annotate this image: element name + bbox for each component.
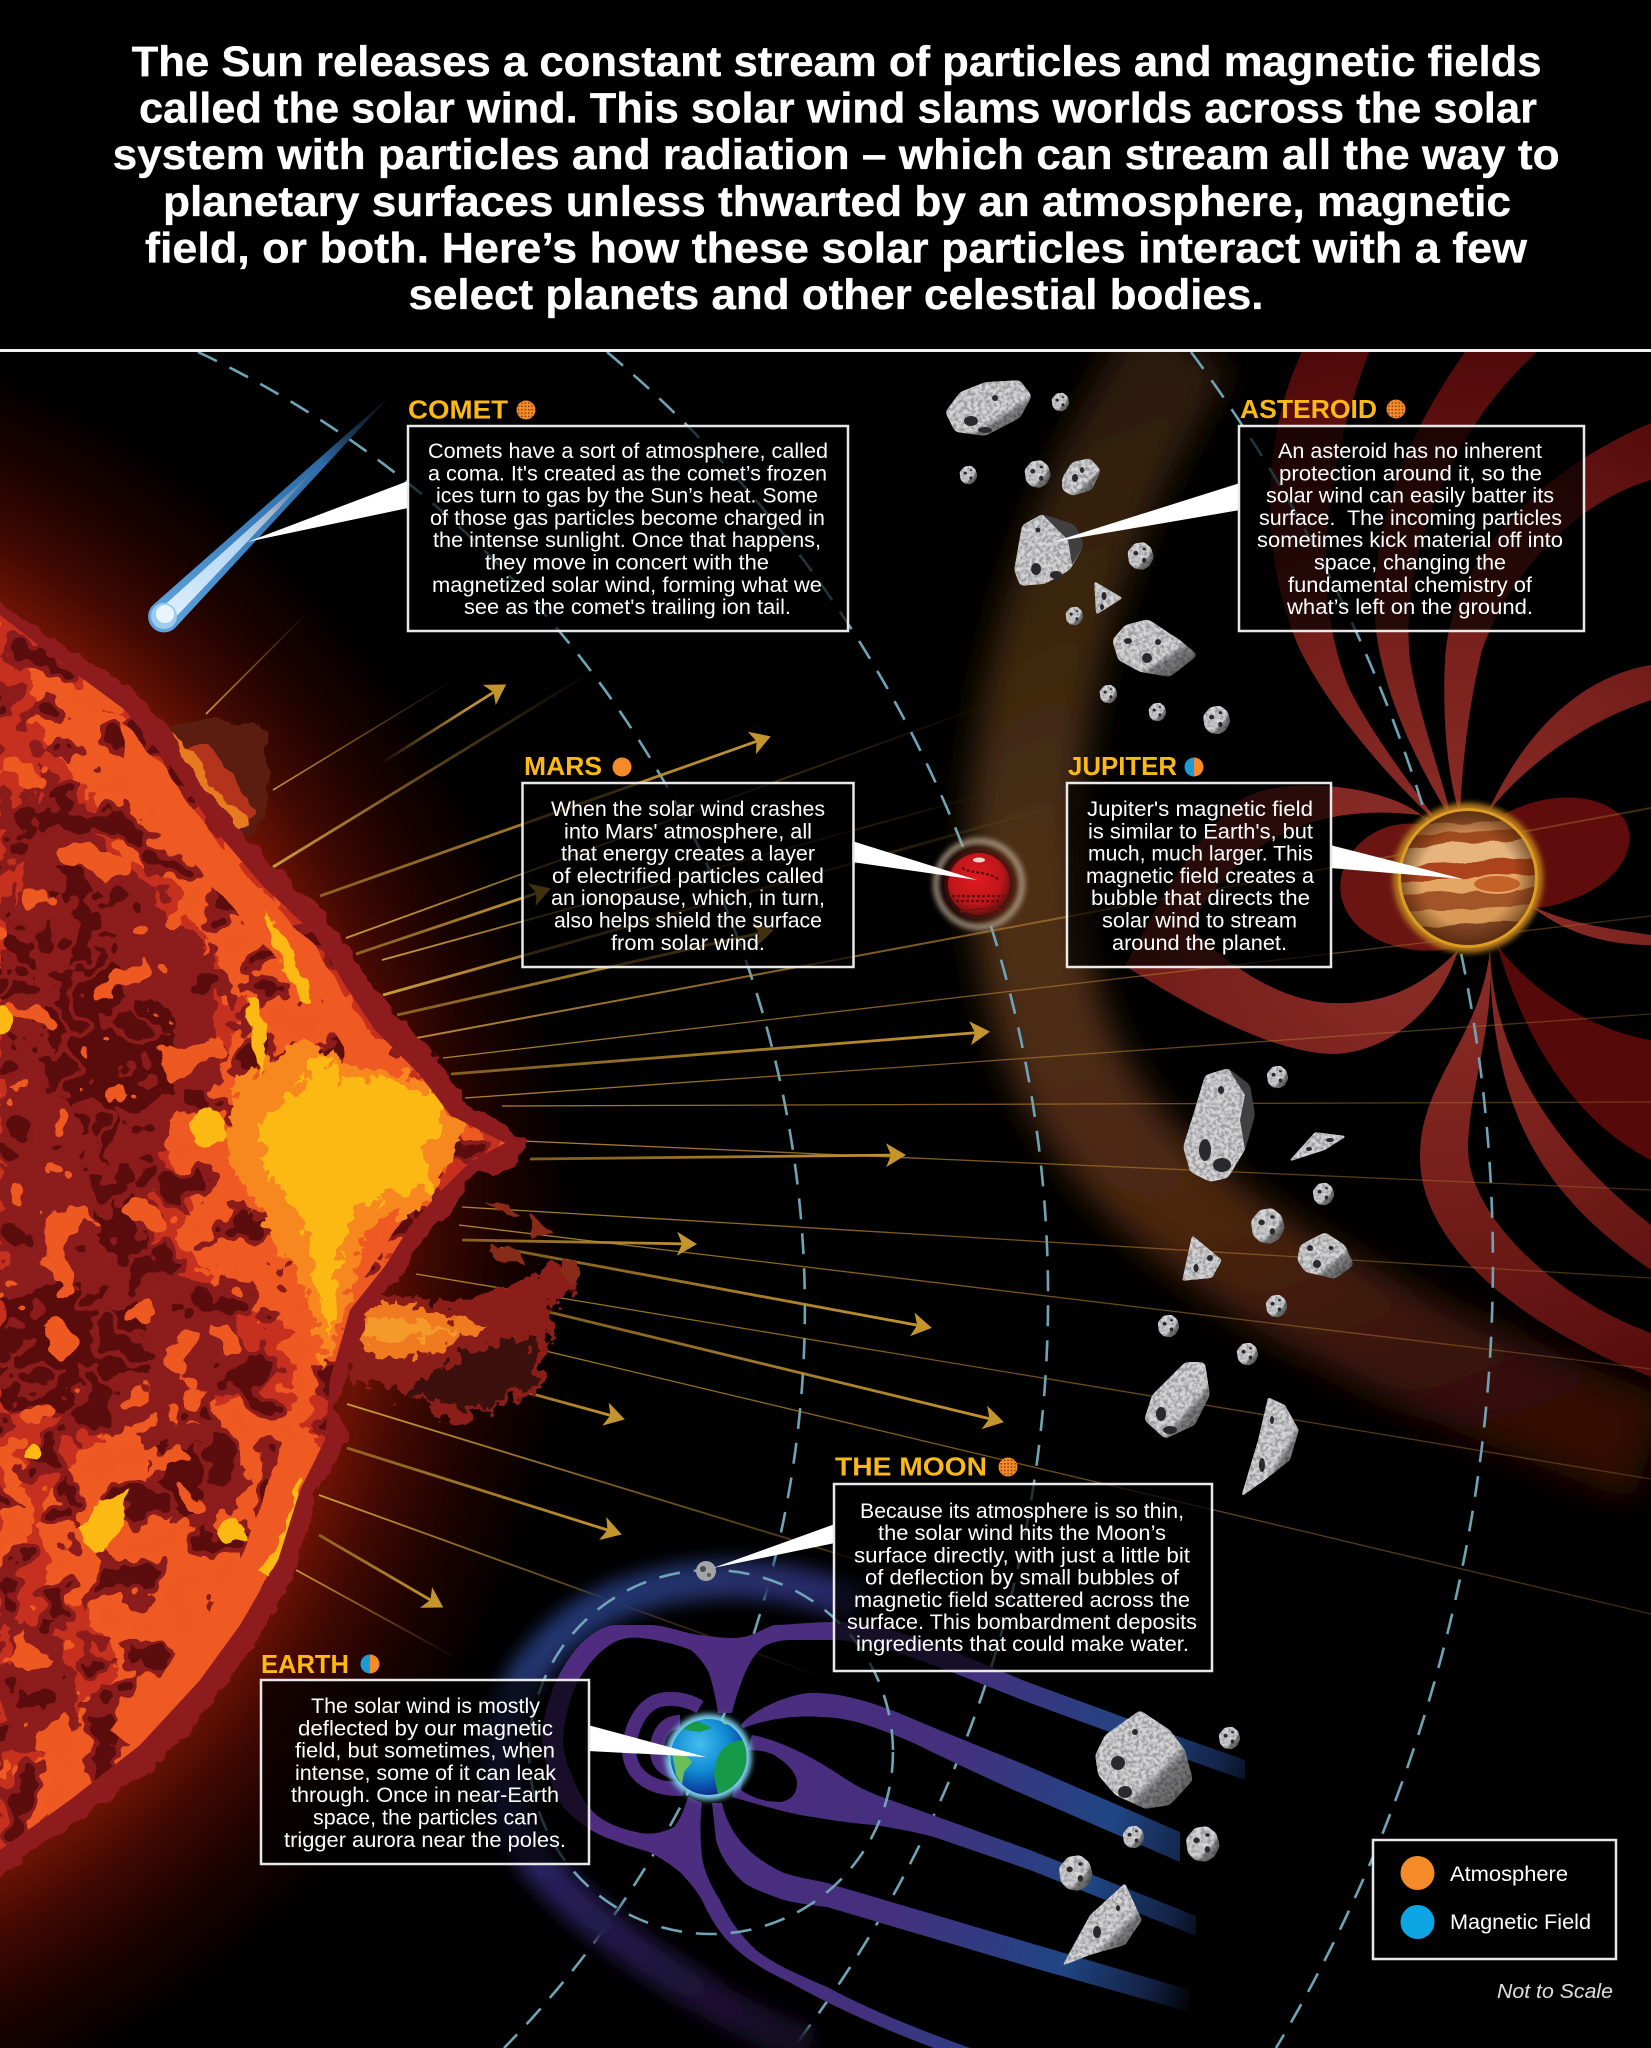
text: asteroid: sometimes kick material off into bbox=[1257, 529, 1563, 552]
sun fragments bbox=[486, 1202, 578, 1290]
text: the Moon: ingredients that could make water. bbox=[856, 1633, 1189, 1656]
lower tail bbox=[712, 1803, 1190, 2012]
arrow: centre 6 bbox=[520, 1305, 999, 1421]
legend: magnetic field: Magnetic Field bbox=[1450, 1911, 1591, 1934]
title: select planets and other celestial bodies. bbox=[408, 272, 1264, 319]
asteroid a1 bbox=[945, 380, 1032, 436]
text: the Moon: Because its atmosphere is so thin, bbox=[860, 1500, 1184, 1523]
callout pointer: comet bbox=[247, 481, 408, 542]
heading: Earth: EARTH bbox=[261, 1649, 349, 1679]
asteroid b7 bbox=[1182, 1235, 1222, 1281]
sun: mottled texture bbox=[0, 622, 505, 1845]
text: Jupiter: Jupiter's magnetic field bbox=[1087, 798, 1313, 821]
text: asteroid: space, changing the bbox=[1314, 552, 1506, 574]
icon: atmosphere hatch bbox=[516, 400, 536, 420]
bow shock haze around Jupiter bbox=[1025, 340, 1651, 1450]
text: comet: Comets have a sort of atmosphere, called bbox=[428, 440, 828, 463]
callout pointer: Earth bbox=[588, 1725, 706, 1757]
sun: clean orange limb bbox=[110, 720, 455, 1750]
sun prominence: upper bbox=[170, 715, 272, 835]
sun prominence: lower bbox=[345, 1265, 578, 1425]
text: comet: the intense sunlight. Once that happens, bbox=[433, 529, 821, 552]
text: comet: see as the comet's trailing ion tail. bbox=[464, 596, 791, 619]
callout pointer: Moon bbox=[713, 1524, 835, 1568]
planet: Earth bbox=[666, 1714, 752, 1800]
solar wind lines bbox=[206, 612, 1651, 1680]
icon: atmosphere hatch bbox=[998, 1458, 1018, 1476]
night side upper tail bbox=[741, 1693, 1180, 1862]
icon: atmosphere and magnetic field bbox=[1184, 758, 1204, 776]
heading: comet: COMET bbox=[408, 394, 508, 424]
text: Jupiter: is similar to Earth's, but bbox=[1088, 820, 1313, 843]
text: Mars: into Mars' atmosphere, all bbox=[564, 820, 812, 843]
text: Mars: of electrified particles called bbox=[552, 865, 824, 888]
text: Jupiter: solar wind to stream bbox=[1102, 910, 1297, 932]
sun: hot spots bbox=[225, 1040, 462, 1370]
title: field, or both. Here’s how these solar particles interact with a few bbox=[145, 226, 1528, 272]
arrow: centre 2 bbox=[530, 1155, 901, 1159]
orbit paths bbox=[198, 352, 1493, 2048]
icon: atmosphere hatch bbox=[1386, 400, 1406, 418]
panel: comet bbox=[408, 394, 848, 631]
title: The Sun releases a constant stream of particles and magnetic fields bbox=[132, 39, 1542, 86]
heading: Jupiter: JUPITER bbox=[1068, 751, 1177, 781]
asteroid c1 bbox=[1095, 1710, 1193, 1809]
text: Earth: The solar wind is mostly bbox=[311, 1695, 541, 1718]
text: the Moon: the solar wind hits the Moon’s bbox=[878, 1522, 1166, 1545]
text: comet: a coma. It's created as the comet’s frozen bbox=[428, 462, 827, 485]
asteroid b12 bbox=[1241, 1397, 1299, 1497]
night side lobe and middle tail bbox=[732, 1735, 1196, 1936]
title: planetary surfaces unless thwarted by an atmosphere, magnetic bbox=[163, 179, 1511, 226]
earth magnetic field bbox=[542, 1622, 1245, 2048]
text: Mars: from solar wind. bbox=[611, 932, 765, 955]
asteroid a8 bbox=[1094, 581, 1123, 615]
text: Mars: that energy creates a layer bbox=[561, 843, 815, 866]
note: not to scale: Not to Scale bbox=[1497, 1981, 1613, 2003]
text: Earth: through. Once in near-Earth bbox=[291, 1784, 559, 1807]
text: Mars: an ionopause, which, in turn, bbox=[551, 887, 825, 910]
arrow: behind Mars box bbox=[356, 890, 546, 954]
asteroid a10 bbox=[1112, 619, 1198, 677]
title: called the solar wind. This solar wind slams worlds across the solar bbox=[139, 86, 1537, 132]
arrow: under Mars text bbox=[397, 931, 769, 1015]
text: comet: of those gas particles become charged in bbox=[430, 507, 825, 530]
text: Earth: intense, some of it can leak bbox=[295, 1762, 556, 1785]
text: Earth bbox=[284, 1695, 566, 1852]
text: Mars: also helps shield the surface bbox=[554, 910, 822, 932]
sun glow bbox=[0, 396, 553, 2048]
heading: the Moon: THE MOON bbox=[835, 1452, 987, 1482]
text: comet bbox=[428, 440, 828, 619]
Jupiter magnetic field bbox=[1125, 352, 1651, 1377]
text: asteroid: fundamental chemistry of bbox=[1288, 574, 1532, 597]
text: comet: they move in concert with the bbox=[485, 552, 769, 574]
text: Jupiter: bubble that directs the bbox=[1091, 887, 1310, 910]
callout pointer: Mars bbox=[852, 841, 977, 880]
asteroid a5 bbox=[1062, 458, 1101, 496]
moon orbit bbox=[529, 1570, 893, 1934]
legend: atmosphere bbox=[1400, 1856, 1568, 1890]
arrow: upper left bbox=[383, 687, 502, 762]
asteroids: lower group bbox=[1059, 1710, 1240, 1966]
text: the Moon bbox=[847, 1500, 1197, 1656]
arrow: lower 1 bbox=[347, 1448, 617, 1533]
sun surface bbox=[0, 615, 505, 1850]
planet: Jupiter bbox=[1386, 791, 1554, 969]
arrow: lower 2 bbox=[319, 1535, 439, 1605]
asteroids: upper group bbox=[945, 380, 1230, 734]
text: the Moon: of deflection by small bubbles of bbox=[865, 1567, 1179, 1590]
text: asteroid: solar wind can easily batter its bbox=[1266, 485, 1554, 508]
asteroid a6: callout target bbox=[1014, 514, 1084, 586]
icon: atmosphere bbox=[612, 758, 632, 776]
text: Mars bbox=[551, 798, 825, 955]
panel: Mars bbox=[522, 751, 854, 967]
asteroid c6 bbox=[1062, 1883, 1142, 1966]
legend bbox=[1373, 1840, 1616, 1959]
text: Jupiter bbox=[1086, 798, 1314, 955]
text: Earth: trigger aurora near the poles. bbox=[284, 1829, 566, 1852]
text: asteroid bbox=[1257, 440, 1563, 619]
text: Earth: space, the particles can bbox=[313, 1806, 538, 1830]
dayside loops bbox=[629, 1699, 700, 1789]
outer loop, funnels and upper tail bbox=[542, 1622, 1245, 2048]
text: the Moon: magnetic field scattered across the bbox=[854, 1589, 1190, 1612]
text: comet: ices turn to gas by the Sun’s heat. Some bbox=[436, 485, 818, 508]
asteroid b6 bbox=[1297, 1232, 1354, 1279]
title: system with particles and radiation – which can stream all the way to bbox=[113, 132, 1560, 179]
heading: asteroid: ASTEROID bbox=[1240, 394, 1377, 424]
sun bbox=[0, 585, 540, 1890]
text: asteroid: protection around it, so the bbox=[1279, 462, 1542, 485]
text: Earth: field, but sometimes, when bbox=[295, 1740, 555, 1763]
text: asteroid: surface. The incoming particles bbox=[1259, 507, 1562, 530]
arrow: centre 1 bbox=[451, 1032, 985, 1074]
title bbox=[113, 39, 1560, 319]
panel: the Moon bbox=[834, 1452, 1212, 1671]
legend: atmosphere: Atmosphere bbox=[1450, 1863, 1568, 1886]
text: Jupiter: much, much larger. This bbox=[1088, 843, 1313, 866]
legend: magnetic field bbox=[1400, 1905, 1591, 1939]
text: asteroid: An asteroid has no inherent bbox=[1278, 440, 1542, 463]
callout pointer: Jupiter bbox=[1330, 845, 1463, 879]
icon: atmosphere and magnetic field bbox=[360, 1654, 380, 1674]
moon bbox=[696, 1561, 716, 1581]
text: Earth: deflected by our magnetic bbox=[298, 1717, 553, 1740]
arrow: centre 3 bbox=[462, 1240, 692, 1244]
text: comet: magnetized solar wind, forming what we bbox=[432, 574, 822, 597]
sun rim bbox=[0, 585, 526, 1890]
text: the Moon: surface. This bombardment deposits bbox=[847, 1611, 1197, 1634]
panel: asteroid bbox=[1239, 394, 1584, 631]
panel: Earth bbox=[261, 1649, 589, 1864]
arrow: centre 4 bbox=[500, 1248, 927, 1327]
text: the Moon: surface directly, with just a little bit bbox=[854, 1544, 1190, 1567]
asteroids: middle group bbox=[1144, 1066, 1354, 1497]
arrow: by Mars heading bbox=[320, 738, 766, 896]
text: Mars: When the solar wind crashes bbox=[551, 798, 825, 821]
heading: Mars: MARS bbox=[524, 751, 602, 781]
arrow: centre 5 bbox=[529, 1393, 625, 1426]
text: Jupiter: around the planet. bbox=[1112, 932, 1287, 955]
text: asteroid: what’s left on the ground. bbox=[1286, 596, 1533, 619]
earth bow shock aura bbox=[500, 1579, 860, 2046]
comet bbox=[148, 396, 390, 632]
asteroid b1 bbox=[1183, 1068, 1255, 1182]
sun: painted regions bbox=[0, 640, 480, 1850]
callout pointer: asteroid bbox=[1053, 483, 1240, 542]
asteroid b11 bbox=[1144, 1362, 1210, 1439]
text: Jupiter: magnetic field creates a bbox=[1086, 865, 1314, 888]
asteroid b3 bbox=[1288, 1132, 1347, 1162]
panel: Jupiter bbox=[1067, 751, 1331, 967]
planet: Mars bbox=[936, 841, 1022, 927]
